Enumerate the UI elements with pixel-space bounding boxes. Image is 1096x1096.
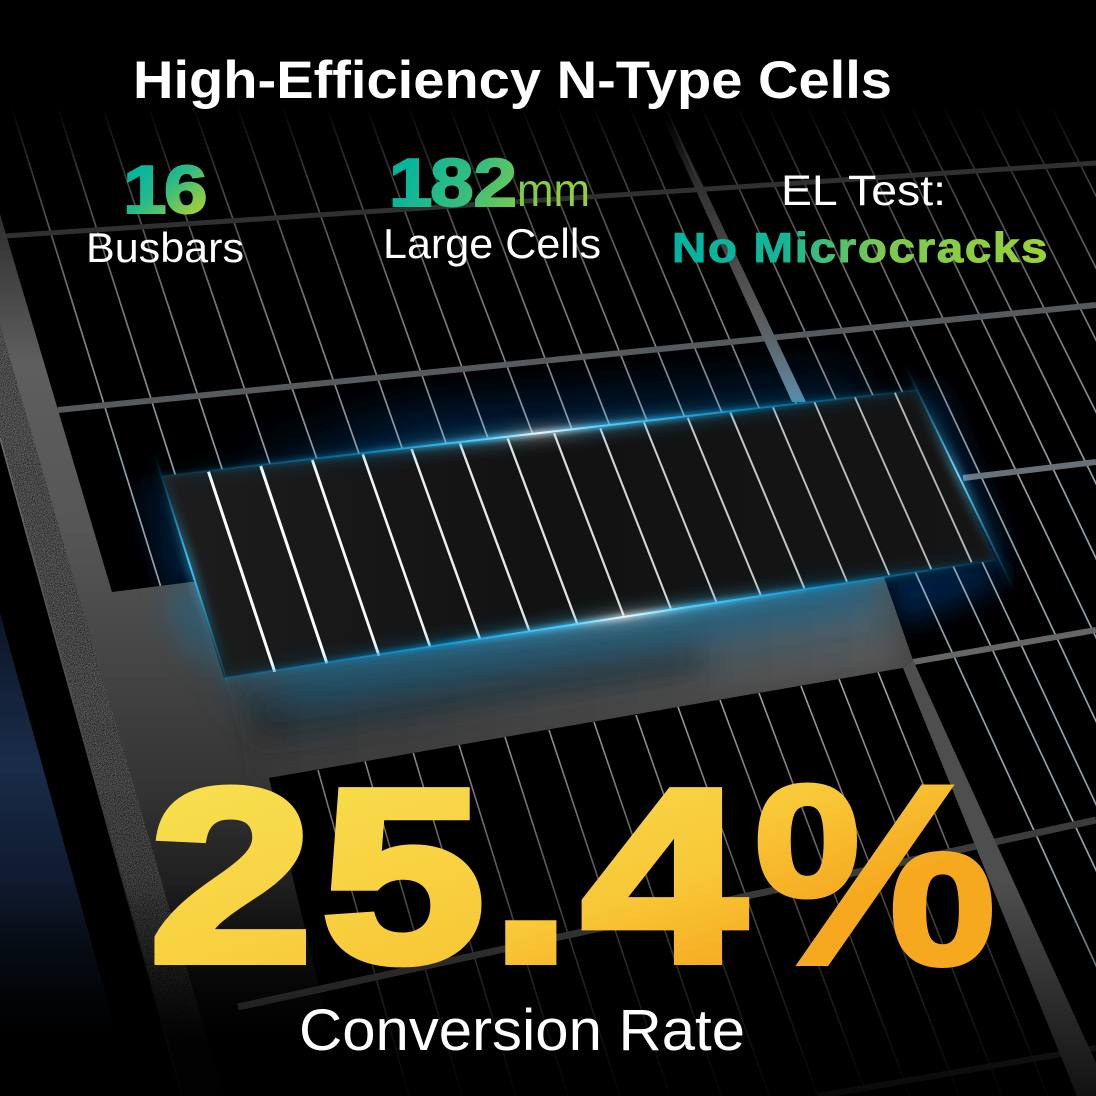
solar panel upper bus bars	[5, 120, 1096, 662]
textured frame rim	[0, 324, 224, 1096]
black wedge beside rim	[0, 438, 182, 1096]
aluminium frame	[0, 214, 913, 1096]
value no microcracks: No Microcracks	[672, 225, 1049, 271]
lower panel bus bars	[238, 660, 1096, 1096]
stat: 182mm large cells	[383, 145, 601, 267]
frame lit and shaded areas with teal glow	[160, 578, 902, 744]
navy reflection left edge	[0, 613, 134, 1096]
stat: 16 busbars	[86, 152, 244, 271]
title: High-Efficiency N-Type Cells	[133, 51, 892, 110]
rim highlight line	[0, 438, 182, 1096]
highlighted solar cell	[162, 390, 996, 678]
headline number 25.4%	[149, 732, 997, 1019]
glowing cell edges	[154, 365, 1015, 700]
unit mm: mm	[517, 164, 590, 216]
lower panel grid lines	[318, 672, 1048, 1096]
lower solar cells panel	[269, 668, 1077, 1096]
number 182: 182	[389, 145, 517, 221]
number 16: 16	[123, 152, 207, 228]
digits 25.4: 25.4	[149, 738, 748, 1014]
label EL test: EL Test:	[781, 167, 946, 215]
caption conversion rate: Conversion Rate	[299, 998, 745, 1063]
percent sign: %	[753, 732, 997, 1019]
bottom fade overlay	[0, 880, 1096, 1096]
label large cells: Large Cells	[383, 220, 601, 267]
navy glow on black cells	[146, 382, 1008, 625]
label busbars: Busbars	[86, 224, 244, 271]
stat: EL test no microcracks	[672, 167, 1049, 271]
cell busbar lines	[208, 393, 972, 672]
